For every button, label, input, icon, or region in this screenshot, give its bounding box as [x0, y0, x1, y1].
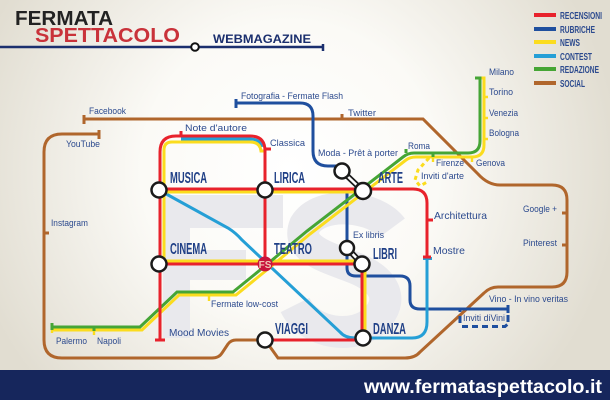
stop labels: Torino [489, 87, 513, 98]
stop labels: Classica [270, 138, 306, 149]
stop labels: Genova [476, 158, 506, 169]
line: social (brown) [44, 114, 567, 358]
stop labels: Inviti diVini [463, 313, 505, 324]
stop labels: Architettura [434, 210, 487, 222]
line: news (yellow) [52, 78, 488, 338]
stop labels: Venezia [489, 108, 519, 119]
stop labels [51, 67, 568, 347]
stop labels: Fermate low-cost [211, 299, 278, 310]
stop labels: Fotografia - Fermate Flash [241, 91, 343, 102]
footer bar: www.fermataspettacolo.it [363, 377, 603, 398]
stop labels: Facebook [89, 106, 126, 117]
stop labels: Pinterest [523, 238, 557, 249]
line: contest (light blue) [159, 139, 432, 338]
stop labels: Vino - In vino veritas [489, 294, 568, 305]
logo: FERMATA [15, 8, 113, 30]
stop labels: Ex libris [353, 230, 384, 241]
stop labels: Twitter [348, 108, 376, 119]
logo [15, 8, 180, 47]
stop labels: Palermo [56, 336, 87, 347]
station names: LIBRI [373, 246, 397, 263]
stop labels: Mood Movies [169, 327, 229, 339]
station names: LIRICA [274, 170, 305, 187]
station: FS badge: FS [259, 260, 272, 271]
stop labels: Milano [489, 67, 514, 78]
stop labels: Roma [408, 141, 431, 152]
station: FS badge [258, 256, 272, 272]
line: inviti d'arte (dotted yellow) [415, 158, 429, 186]
stop labels: Inviti d'arte [421, 171, 464, 182]
footer bar [0, 370, 610, 400]
stations [152, 164, 371, 348]
line: rubriche (dark blue) [236, 99, 509, 326]
station names [170, 170, 406, 338]
watermark: FS [163, 195, 392, 338]
station names: VIAGGI [275, 321, 308, 338]
stop labels: Mostre [433, 245, 465, 257]
station names: CINEMA [170, 241, 207, 258]
stop labels: Firenze [436, 158, 464, 169]
interchange: moda-arte [334, 164, 371, 199]
stop labels: Instagram [51, 218, 88, 229]
stop labels: Bologna [489, 128, 520, 139]
header line with station [0, 43, 323, 51]
stop labels: Note d'autore [185, 123, 247, 134]
station names: ARTE [378, 170, 403, 187]
legend: SOCIAL [560, 78, 585, 90]
stop labels: Google + [523, 204, 557, 215]
interchange: ex libris-libri [340, 241, 370, 272]
legend: NEWS [560, 37, 580, 49]
webmagazine heading: WEBMAGAZINE [213, 32, 311, 46]
line: redazione (green) [52, 78, 480, 331]
stop labels: Napoli [97, 336, 121, 347]
stop labels: Moda - Prêt à porter [318, 148, 398, 159]
line: recensioni (red) [155, 131, 433, 340]
logo: SPETTACOLO [35, 25, 180, 47]
legend [534, 10, 602, 90]
station names: MUSICA [170, 170, 207, 187]
legend: CONTEST [560, 51, 592, 63]
station names: DANZA [373, 321, 406, 338]
stop labels: YouTube [66, 139, 100, 150]
station names: TEATRO [274, 241, 312, 258]
